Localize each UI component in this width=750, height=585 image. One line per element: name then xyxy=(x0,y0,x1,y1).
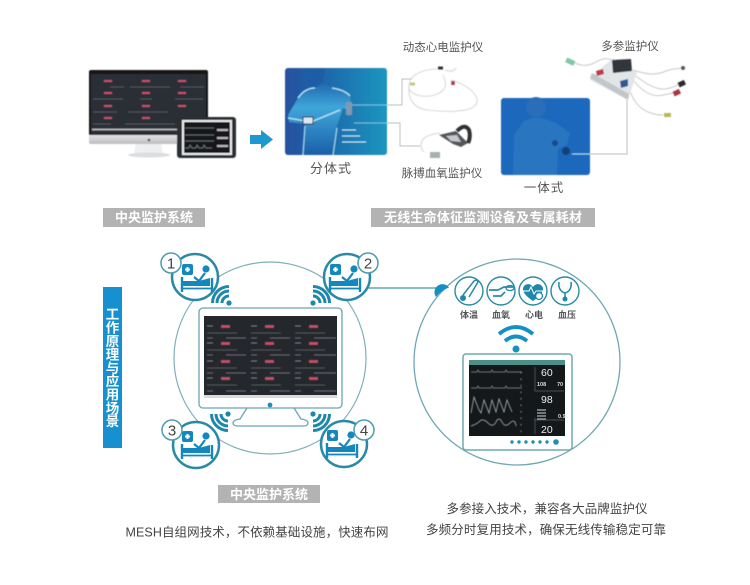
sidebar: working principle xyxy=(103,287,122,448)
sidebar: working principle: 工 xyxy=(106,307,119,322)
panel: bedside detail circle xyxy=(414,259,620,465)
panel: integrated body image xyxy=(501,97,590,175)
heading: central monitoring system xyxy=(103,208,205,227)
sidebar: working principle: 作 xyxy=(106,320,120,336)
label: integrated: 一体式 xyxy=(524,181,564,195)
bedside monitor illustration: 0.9 xyxy=(558,414,566,420)
wifi signal: top left xyxy=(212,286,232,306)
bed node 1: 1 xyxy=(167,256,175,272)
bed node 4 xyxy=(321,420,374,467)
sidebar: working principle: 用 xyxy=(106,388,119,402)
bed node 2 xyxy=(324,253,378,300)
panel: split type body image xyxy=(285,68,387,155)
bedside monitor illustration: 70 xyxy=(557,382,563,388)
central monitoring devices xyxy=(89,70,236,158)
large network circle xyxy=(174,262,366,454)
parameter labels xyxy=(460,309,576,320)
desktop monitor xyxy=(89,70,208,158)
ECG monitor cables xyxy=(409,68,477,111)
icon: wifi xyxy=(499,327,533,352)
icon: finger oximeter xyxy=(487,277,515,305)
caption: multi-parameter access: 多参接入技术，兼容各大品牌监护仪 xyxy=(446,501,648,516)
icon: heart ECG xyxy=(519,277,547,305)
bedside monitor illustration: 60 xyxy=(541,367,553,379)
bedside monitor illustration: 20 xyxy=(541,424,553,436)
heading: central monitoring system lower: 中央监护系统 xyxy=(230,487,308,502)
sidebar: working principle: 景 xyxy=(106,414,119,429)
connector node xyxy=(434,284,449,297)
sidebar: working principle: 理 xyxy=(106,348,120,362)
label: split type: 分体式 xyxy=(310,161,352,176)
label: pulse oximeter: 脉搏血氧监护仪 xyxy=(402,166,483,180)
wifi signal: bottom left xyxy=(212,411,231,430)
bed node 1 xyxy=(161,253,218,300)
heading: wireless vital signs equipment: 无线生命体征监测设备及专属耗材 xyxy=(384,210,582,225)
label: ECG monitor: 动态心电监护仪 xyxy=(403,40,484,54)
bed node 3: 3 xyxy=(168,422,176,440)
head xyxy=(302,68,325,88)
multi-parameter monitor device xyxy=(565,57,686,117)
icon: stethoscope xyxy=(551,277,579,305)
parameter labels: 心电 xyxy=(525,309,543,320)
bed node 2: 2 xyxy=(364,256,372,272)
wifi signal: top right xyxy=(310,286,330,306)
wifi signal: bottom right xyxy=(310,411,330,430)
arrow xyxy=(250,130,273,149)
icon: thermometer xyxy=(455,277,483,305)
sidebar: working principle: 应 xyxy=(106,373,119,389)
parameter labels: 体温 xyxy=(460,309,478,320)
connector lines xyxy=(387,79,627,154)
label: multi-parameter monitor: 多参监护仪 xyxy=(601,39,659,53)
sidebar: working principle: 场 xyxy=(106,401,119,416)
sidebar: working principle: 与 xyxy=(106,361,119,376)
bedside monitor illustration: 108 xyxy=(537,382,546,388)
bedside monitor illustration: 98 xyxy=(541,394,553,406)
network diagram xyxy=(161,253,440,468)
connector to detail circle xyxy=(368,287,440,289)
bedside monitor illustration xyxy=(463,354,572,450)
bed node 4: 4 xyxy=(360,422,368,440)
heading: central monitoring system lower xyxy=(218,485,320,503)
bed node 3 xyxy=(162,420,219,468)
parameter labels: 血压 xyxy=(558,309,576,320)
caption: multi-frequency time-sharing: 多频分时复用技术，确保无线传输稳定可靠 xyxy=(426,522,666,537)
pulse oximeter xyxy=(421,127,470,158)
central monitor illustration xyxy=(199,308,342,426)
heading: wireless vital signs equipment xyxy=(371,208,595,227)
caption: MESH network: MESH自组网技术，不依赖基础设施，快速布网 xyxy=(126,524,388,540)
parameter labels: 血氧 xyxy=(492,309,510,320)
tablet monitor xyxy=(177,117,236,158)
sidebar: working principle: 原 xyxy=(106,334,119,349)
heading: central monitoring system: 中央监护系统 xyxy=(115,210,193,225)
